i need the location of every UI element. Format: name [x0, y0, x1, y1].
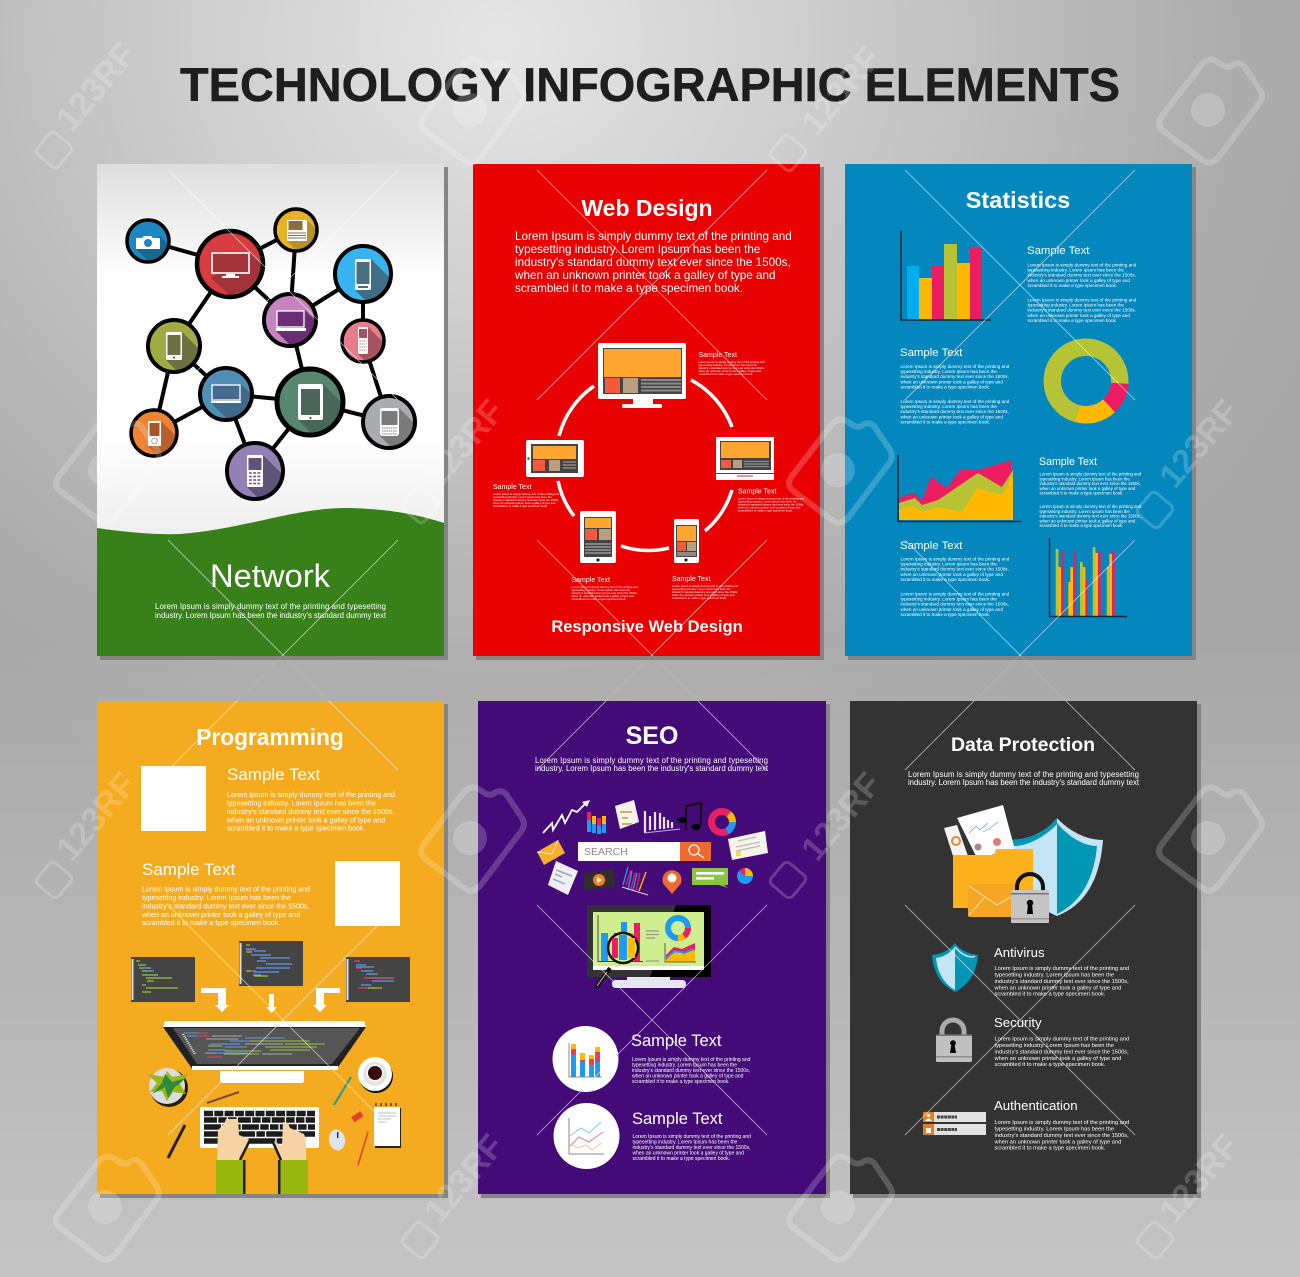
caption: top right: Sample Text — [698, 352, 737, 359]
text block: sample 1 — [1027, 245, 1137, 323]
text block: authentication: when an unknown printer took a galley of type and — [994, 1140, 1121, 1146]
icon: map pin — [662, 870, 682, 894]
text block: sample 4: industry's standard dummy text ever since the 1500s, — [900, 602, 1009, 607]
panel: statistics — [845, 164, 1196, 660]
caption: bottom right: Lorem Ipsum is simply dummy text of the printing and — [672, 584, 739, 588]
text block: sample 2: typesetting industry. Lorem Ipsum has been the — [142, 894, 291, 902]
node: olive phone — [146, 318, 202, 374]
text block: authentication: Authentication — [994, 1098, 1078, 1113]
text block: sample 2 — [141, 860, 310, 927]
caption: bottom left: Lorem Ipsum is simply dummy text of the printing and — [572, 585, 638, 589]
panel: data protection — [850, 701, 1201, 1198]
text block: antivirus: typesetting industry. Lorem Ipsum has been the — [994, 972, 1114, 978]
text block: sample 4: Sample Text — [900, 540, 963, 552]
icon: desktop monitor — [598, 343, 686, 408]
caption: left: industry's standard dummy text ever since the 1500s, — [493, 498, 559, 502]
icon: notepad — [374, 1103, 401, 1148]
text block: security: scrambled it to make a type specimen book. — [994, 1062, 1106, 1068]
icon: security padlock — [936, 1020, 972, 1062]
caption: right: when an unknown printer took a galley of type and — [738, 506, 801, 510]
title: TECHNOLOGY INFOGRAPHIC ELEMENTS — [180, 58, 1120, 111]
text block: sample 4: scrambled it to make a type specimen book. — [900, 612, 990, 617]
text block: security: Lorem Ipsum is simply dummy text of the printing and — [994, 1036, 1129, 1042]
text block: sample 3: typesetting industry. Lorem Ipsum has been the — [1040, 476, 1130, 481]
icon: plant — [147, 1068, 188, 1107]
watermarks: 123RF — [794, 40, 889, 142]
icon: mouse — [327, 1128, 347, 1152]
node: laptop — [262, 292, 318, 348]
caption: bottom right — [672, 576, 739, 600]
text block: sample 2: industry's standard dummy text ever since the 1500s, — [142, 902, 309, 910]
caption: top right: scrambled it to make a type specimen book. — [698, 372, 753, 376]
text block: antivirus: scrambled it to make a type specimen book. — [994, 992, 1106, 998]
text block: security: when an unknown printer took a galley of type and — [994, 1056, 1121, 1062]
heading: statistics: Statistics — [966, 187, 1070, 213]
text block: authentication: Lorem Ipsum is simply dummy text of the printing and — [994, 1120, 1129, 1126]
icon: donut — [712, 812, 732, 832]
icon: document — [548, 861, 578, 895]
illustration: desktop monitor from above — [163, 1021, 366, 1083]
panel: web design — [473, 164, 824, 660]
text block: sample 1: when an unknown printer took a galley of type and — [1028, 313, 1130, 318]
caption: bottom right: when an unknown printer took a galley of type and — [672, 593, 735, 597]
text block: sample 3: typesetting industry. Lorem Ipsum has been the — [1040, 509, 1130, 514]
watermarks: 123RF — [794, 766, 889, 868]
caption: bottom left: industry's standard dummy text ever since the 1500s, — [572, 591, 638, 595]
caption: top right: when an unknown printer took a galley of type and — [698, 369, 761, 373]
text block: sample 1: industry's standard dummy text ever since the 1500s, — [632, 1068, 750, 1074]
text block: network: Lorem Ipsum is simply dummy text of the printing and typesetting — [155, 602, 386, 611]
text block: sample 2: when an unknown printer took a galley of type and — [632, 1150, 744, 1156]
text block: sample 3: when an unknown printer took a galley of type and — [1040, 486, 1136, 491]
heading: web design: Web Design — [581, 195, 713, 221]
caption: top right: industry's standard dummy text ever since the 1500s, — [698, 366, 765, 370]
text block: sample 4: Lorem Ipsum is simply dummy text of the printing and — [900, 556, 1010, 562]
bar chart — [901, 231, 991, 320]
text block: sample 3: scrambled it to make a type specimen book. — [1040, 491, 1123, 496]
text block: sample 1: Lorem Ipsum is simply dummy text of the printing and — [1028, 262, 1137, 268]
caption: top right — [698, 352, 765, 376]
text block: sample 2: Lorem Ipsum is simply dummy text of the printing and — [632, 1134, 751, 1140]
text block: sample 1: industry's standard dummy text ever since the 1500s, — [1028, 308, 1136, 313]
image placeholder: right — [335, 861, 400, 926]
area chart — [898, 455, 1021, 522]
text block: sample 2: when an unknown printer took a galley of type and — [900, 379, 1003, 384]
icon: newspaper — [728, 831, 768, 860]
watermark crosshair lines — [168, 170, 1135, 1135]
caption: bottom left: scrambled it to make a type specimen book. — [572, 597, 626, 601]
text block: sample 4: typesetting industry. Lorem Ipsum has been the — [900, 562, 997, 567]
donut chart — [1052, 347, 1120, 415]
text block: sample 1: when an unknown printer took a galley of type and — [226, 816, 385, 824]
watermarks: 123RF — [49, 36, 144, 138]
text block: sample 2: industry's standard dummy text ever since the 1500s, — [900, 374, 1009, 379]
illustration: envelope — [968, 884, 1015, 917]
text block: sample 2: scrambled it to make a type specimen book. — [900, 384, 990, 389]
node: keypad phone purple — [225, 441, 285, 501]
text block: sample 1: when an unknown printer took a galley of type and — [632, 1074, 744, 1080]
caption: left — [493, 484, 560, 508]
caption: right: Lorem Ipsum is simply dummy text of the printing and — [738, 496, 805, 500]
text block: intro: when an unknown printer took a galley of type and — [514, 269, 776, 282]
icon: mini bars — [587, 812, 606, 834]
icon: line chart circle — [554, 1103, 620, 1169]
caption: left: when an unknown printer took a galley of type and — [493, 501, 556, 505]
heading: network: Network — [210, 557, 331, 594]
watermarks: 123RF — [49, 766, 144, 868]
heading: programming: Programming — [196, 724, 344, 750]
text block: antivirus — [994, 945, 1129, 998]
text block: sample 4: Lorem Ipsum is simply dummy text of the printing and — [900, 592, 1010, 596]
text block: intro: industry. Lorem Ipsum has been the industry's standard dummy text — [535, 764, 769, 773]
icon: usb stick — [351, 1111, 364, 1122]
node: media player — [129, 408, 179, 458]
icon: smartphone — [674, 519, 699, 563]
icon: coffee cup — [358, 1057, 393, 1093]
icon: video — [583, 869, 615, 890]
panel: network — [97, 164, 449, 660]
caption: left: scrambled it to make a type specimen book. — [493, 504, 548, 508]
icon: authentication fields — [923, 1112, 986, 1135]
text block: sample 3: Lorem Ipsum is simply dummy text of the printing and — [1040, 472, 1142, 476]
icon: growth arrow — [543, 800, 590, 833]
caption: bottom left — [572, 577, 638, 601]
text block: antivirus: Lorem Ipsum is simply dummy text of the printing and — [994, 966, 1129, 972]
text block: sample 4: industry's standard dummy text ever since the 1500s, — [900, 567, 1009, 572]
icon: antivirus shield — [932, 943, 978, 992]
illustration: documents — [944, 805, 1015, 858]
text block: sample 2: when an unknown printer took a galley of type and — [900, 414, 1003, 419]
caption: bottom right: Sample Text — [672, 576, 710, 583]
icon: tablet landscape — [526, 440, 584, 477]
green wave footer — [97, 508, 444, 656]
icon: slanted bars — [622, 867, 648, 895]
caption: left: Sample Text — [493, 484, 531, 491]
icon: hands on keyboard — [216, 1119, 308, 1194]
caption: bottom right: industry's standard dummy text ever since the 1500s, — [672, 590, 738, 594]
text block: security: industry's standard dummy text ever since the 1500s, — [994, 1050, 1129, 1056]
text block: sample 2: Sample Text — [632, 1110, 723, 1128]
icon: report sheet — [615, 800, 639, 829]
caption: bottom left: typesetting industry. Lorem Ipsum has been the — [572, 588, 631, 592]
node: tablet — [274, 366, 346, 438]
text block: antivirus: industry's standard dummy text ever since the 1500s, — [994, 979, 1129, 985]
text block: sample 1: Sample Text — [631, 1032, 722, 1050]
text block: antivirus: when an unknown printer took a galley of type and — [994, 986, 1121, 992]
text block: sample 2: Lorem Ipsum is simply dummy text of the printing and — [900, 399, 1010, 404]
text block: sample 1: typesetting industry. Lorem Ipsum has been the — [1028, 268, 1124, 273]
text block: sample 1: typesetting industry. Lorem Ipsum has been the — [1028, 303, 1124, 308]
text block: sample 1: industry's standard dummy text ever since the 1500s, — [1028, 273, 1136, 278]
text block: intro: Lorem Ipsum is simply dummy text of the printing and typesetting — [908, 770, 1139, 779]
icon: envelope — [537, 840, 565, 865]
text block: intro: Lorem Ipsum is simply dummy text of the printing and — [515, 230, 792, 243]
icon: magnifier — [596, 933, 638, 988]
text block: sample 4: when an unknown printer took a galley of type and — [900, 607, 1003, 612]
text block: sample 2 — [900, 347, 1010, 424]
text block: security: Security — [994, 1015, 1042, 1030]
caption: bottom right: typesetting industry. Lorem Ipsum has been the — [672, 587, 731, 591]
code window: right — [346, 957, 410, 1002]
heading: seo: SEO — [626, 722, 678, 750]
responsive cycle ring — [558, 380, 732, 550]
panel: programming — [97, 701, 448, 1198]
watermarks: 123RF — [417, 1128, 512, 1230]
text block: sample 2: Lorem Ipsum is simply dummy text of the printing and — [142, 886, 310, 894]
text block: sample 3: Lorem Ipsum is simply dummy text of the printing and — [1040, 504, 1142, 509]
image placeholder: top — [141, 766, 206, 831]
caption: right: industry's standard dummy text ever since the 1500s, — [738, 502, 804, 506]
text block: sample 1: when an unknown printer took a galley of type and — [1028, 278, 1130, 283]
text block: sample 4 — [900, 540, 1010, 617]
text block: authentication: typesetting industry. Lorem Ipsum has been the — [994, 1126, 1114, 1132]
text block: sample 3 — [1039, 456, 1142, 528]
text block: authentication — [994, 1098, 1129, 1152]
text block: sample 2 — [632, 1110, 751, 1162]
text block: sample 2: when an unknown printer took a galley of type and — [141, 911, 300, 919]
icon: stacked bar circle — [552, 1026, 618, 1092]
caption: left: Lorem Ipsum is simply dummy text of the printing and — [493, 492, 560, 496]
text block: sample 1: Lorem Ipsum is simply dummy text of the printing and — [1028, 298, 1137, 302]
text block: sample 2: Sample Text — [142, 860, 236, 879]
caption: right — [738, 488, 805, 512]
text block: sample 2: typesetting industry. Lorem Ipsum has been the — [900, 404, 997, 409]
watermarks: 123RF — [417, 393, 512, 495]
text block: sample 1: typesetting industry. Lorem Ipsum has been the — [632, 1062, 737, 1068]
text block: sample 1: scrambled it to make a type specimen book. — [227, 824, 365, 832]
caption: left: typesetting industry. Lorem Ipsum has been the — [493, 495, 552, 499]
icon: pencils and pen — [168, 1077, 368, 1165]
watermarks: 123RF — [1152, 393, 1247, 495]
caption: bottom left: Sample Text — [572, 577, 610, 584]
text block: sample 1: industry's standard dummy text ever since the 1500s, — [227, 808, 394, 816]
text block: sample 2: scrambled it to make a type specimen book. — [632, 1156, 730, 1162]
heading: data protection: Data Protection — [951, 734, 1095, 756]
text block: sample 1: Lorem Ipsum is simply dummy text of the printing and — [632, 1057, 751, 1063]
text block: security: typesetting industry. Lorem Ipsum has been the — [994, 1043, 1114, 1049]
node: camera — [125, 218, 171, 264]
grouped bar chart — [1050, 538, 1127, 616]
text block: sample 4: when an unknown printer took a galley of type and — [900, 572, 1003, 577]
icon: laptop — [716, 437, 774, 480]
arrows into monitor — [201, 988, 340, 1013]
text block: sample 1: scrambled it to make a type specimen book. — [1028, 283, 1117, 288]
watermarks: 123RF — [1152, 1128, 1247, 1230]
text block: sample 1: Lorem Ipsum is simply dummy text of the printing and — [227, 791, 395, 799]
heading: responsive web design: Responsive Web Design — [551, 618, 743, 636]
text block: intro: scrambled it to make a type specimen book. — [515, 282, 743, 295]
illustration: padlock — [1011, 874, 1049, 923]
node: keypad phone — [340, 318, 386, 364]
text block: sample 2: industry's standard dummy text ever since the 1500s, — [900, 409, 1009, 414]
text block: intro: typesetting industry. Lorem Ipsum has been the — [515, 243, 760, 256]
text block: sample 3: industry's standard dummy text ever since the 1500s, — [1040, 481, 1141, 486]
text block: network: industry. Lorem Ipsum has been the industry's standard dummy text — [155, 611, 387, 620]
text block: sample 3: scrambled it to make a type specimen book. — [1040, 523, 1123, 528]
icon: keyboard — [200, 1107, 319, 1148]
icon: chat bubble — [692, 868, 728, 888]
text block: sample 4: typesetting industry. Lorem Ipsum has been the — [900, 597, 997, 602]
caption: right: typesetting industry. Lorem Ipsum has been the — [738, 500, 797, 504]
illustration: shield — [1010, 818, 1103, 916]
code window: left — [131, 957, 195, 1002]
illustration: folder — [953, 849, 1033, 908]
text block: sample 2: Sample Text — [900, 347, 963, 359]
node: monitor — [194, 228, 266, 300]
search bar — [578, 842, 711, 861]
text block: authentication: scrambled it to make a type specimen book. — [994, 1146, 1106, 1152]
search bar: SEARCH — [584, 846, 628, 858]
text block: antivirus: Antivirus — [994, 945, 1045, 960]
text block: sample 3: when an unknown printer took a galley of type and — [1040, 518, 1136, 523]
caption: bottom left: when an unknown printer took a galley of type and — [572, 594, 634, 598]
text block: intro: industry. Lorem Ipsum has been the industry's standard dummy text — [908, 778, 1140, 787]
text block: authentication: industry's standard dummy text ever since the 1500s, — [994, 1133, 1129, 1139]
text block: intro: Lorem Ipsum is simply dummy text of the printing and typesetting — [535, 756, 768, 765]
text block: sample 2: scrambled it to make a type specimen book. — [900, 419, 990, 424]
text block: sample 2: scrambled it to make a type specimen book. — [142, 919, 280, 927]
node: printer — [273, 207, 319, 253]
text block: sample 1: typesetting industry. Lorem Ipsum has been the — [227, 800, 376, 808]
text block: sample 2: industry's standard dummy text ever since the 1500s, — [632, 1145, 750, 1151]
caption: right: Sample Text — [738, 488, 776, 496]
network connections — [148, 230, 389, 471]
text block: sample 1: Sample Text — [227, 765, 321, 784]
text block: intro: industry's standard dummy text ever since the 1500s, — [515, 256, 791, 269]
illustration: analytics monitor — [587, 905, 711, 988]
caption: top right: typesetting industry. Lorem Ipsum has been the — [698, 363, 758, 367]
text block: security — [994, 1015, 1129, 1068]
code window: center — [239, 941, 303, 986]
icon: music note — [678, 803, 701, 830]
caption: bottom right: scrambled it to make a type specimen book. — [672, 596, 727, 600]
icon: pie chart — [737, 868, 753, 884]
text block: sample 2: typesetting industry. Lorem Ipsum has been the — [900, 369, 997, 374]
caption: right: scrambled it to make a type specimen book. — [738, 508, 793, 512]
node: steel laptop — [198, 366, 254, 422]
caption: top right: Lorem Ipsum is simply dummy text of the printing and — [698, 360, 765, 364]
node: qwerty phone — [361, 394, 417, 450]
text block: sample 1 — [631, 1032, 751, 1085]
icon: line bars — [644, 811, 680, 833]
text block: sample 1 — [226, 765, 395, 832]
node: smartphone — [333, 244, 393, 304]
text block: sample 3: Sample Text — [1039, 456, 1097, 468]
text block: sample 1: scrambled it to make a type specimen book. — [632, 1079, 730, 1085]
panel: seo — [478, 701, 830, 1198]
text block: sample 1: scrambled it to make a type specimen book. — [1028, 318, 1117, 323]
text block: sample 3: industry's standard dummy text ever since the 1500s, — [1040, 514, 1141, 519]
text block: sample 1: Sample Text — [1027, 245, 1090, 257]
icon: tablet portrait — [580, 511, 616, 563]
text block: sample 4: scrambled it to make a type specimen book. — [900, 577, 990, 582]
text block: sample 2: Lorem Ipsum is simply dummy text of the printing and — [900, 364, 1010, 369]
text block: sample 2: typesetting industry. Lorem Ipsum has been the — [632, 1140, 738, 1146]
